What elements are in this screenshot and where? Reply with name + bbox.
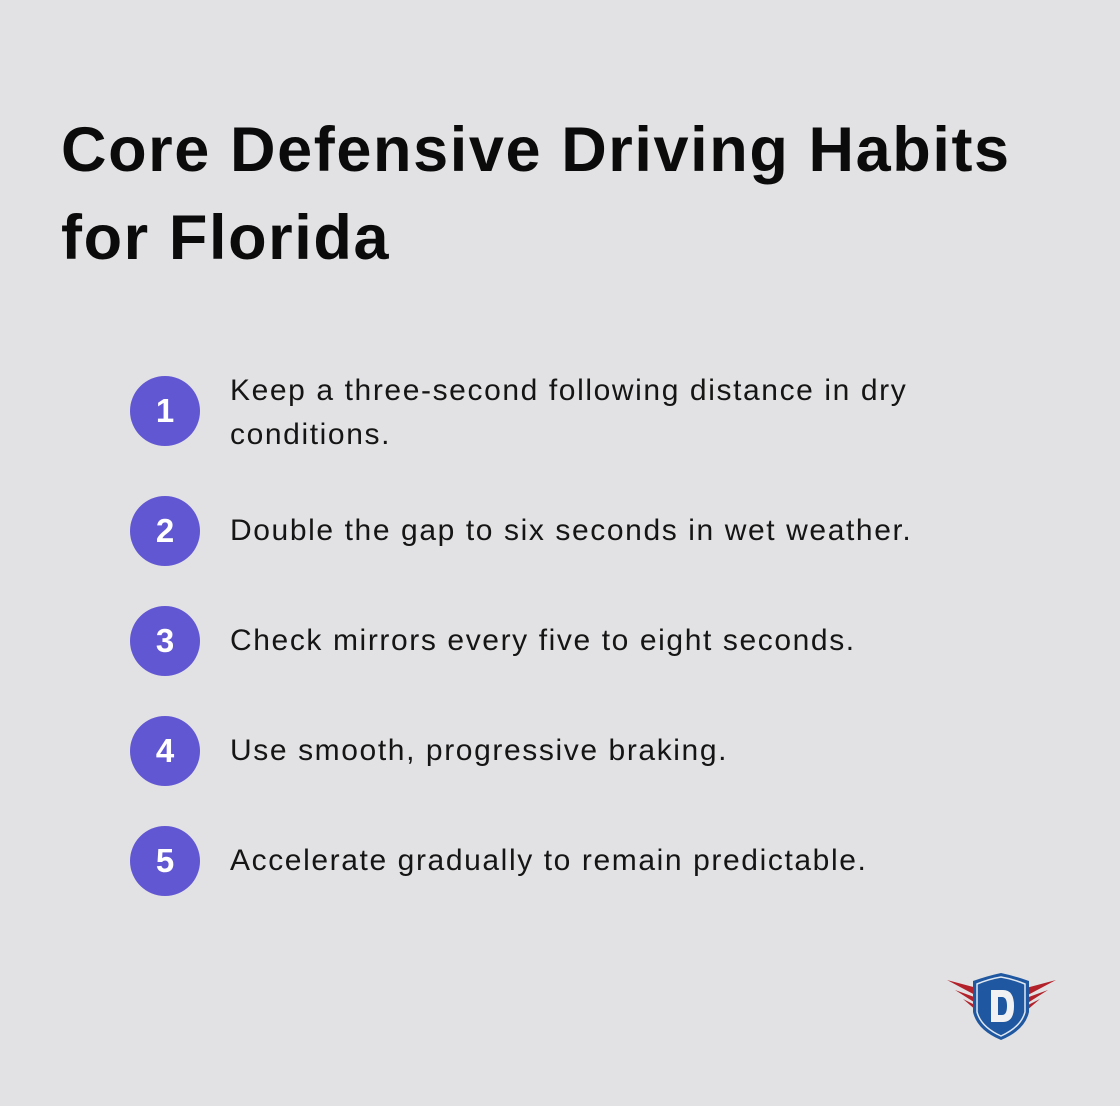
item 3 <box>130 606 856 676</box>
text 1: Keep a three-second following distance in dry conditions. <box>230 374 907 451</box>
number badge 5 <box>130 826 200 896</box>
item 2 <box>130 496 912 566</box>
number badge 1: 1 <box>156 392 174 429</box>
number badge 5: 5 <box>156 842 174 879</box>
item 5 <box>130 826 867 896</box>
number badge 4: 4 <box>156 732 174 769</box>
icon: logo shield with wings <box>947 973 1056 1040</box>
text 5: Accelerate gradually to remain predictable. <box>230 844 867 877</box>
title <box>61 115 1011 273</box>
number badge 1 <box>130 376 200 446</box>
title: for Florida <box>61 203 390 273</box>
text 3: Check mirrors every five to eight seconds. <box>230 624 856 657</box>
title: Core Defensive Driving Habits <box>61 115 1011 185</box>
number badge 2 <box>130 496 200 566</box>
item 4 <box>130 716 728 786</box>
number badge 3 <box>130 606 200 676</box>
number badge 4 <box>130 716 200 786</box>
text 4: Use smooth, progressive braking. <box>230 734 728 767</box>
number badge 3: 3 <box>156 622 174 659</box>
text 2: Double the gap to six seconds in wet weather. <box>230 514 912 547</box>
number badge 2: 2 <box>156 512 174 549</box>
item 1 <box>130 374 907 451</box>
